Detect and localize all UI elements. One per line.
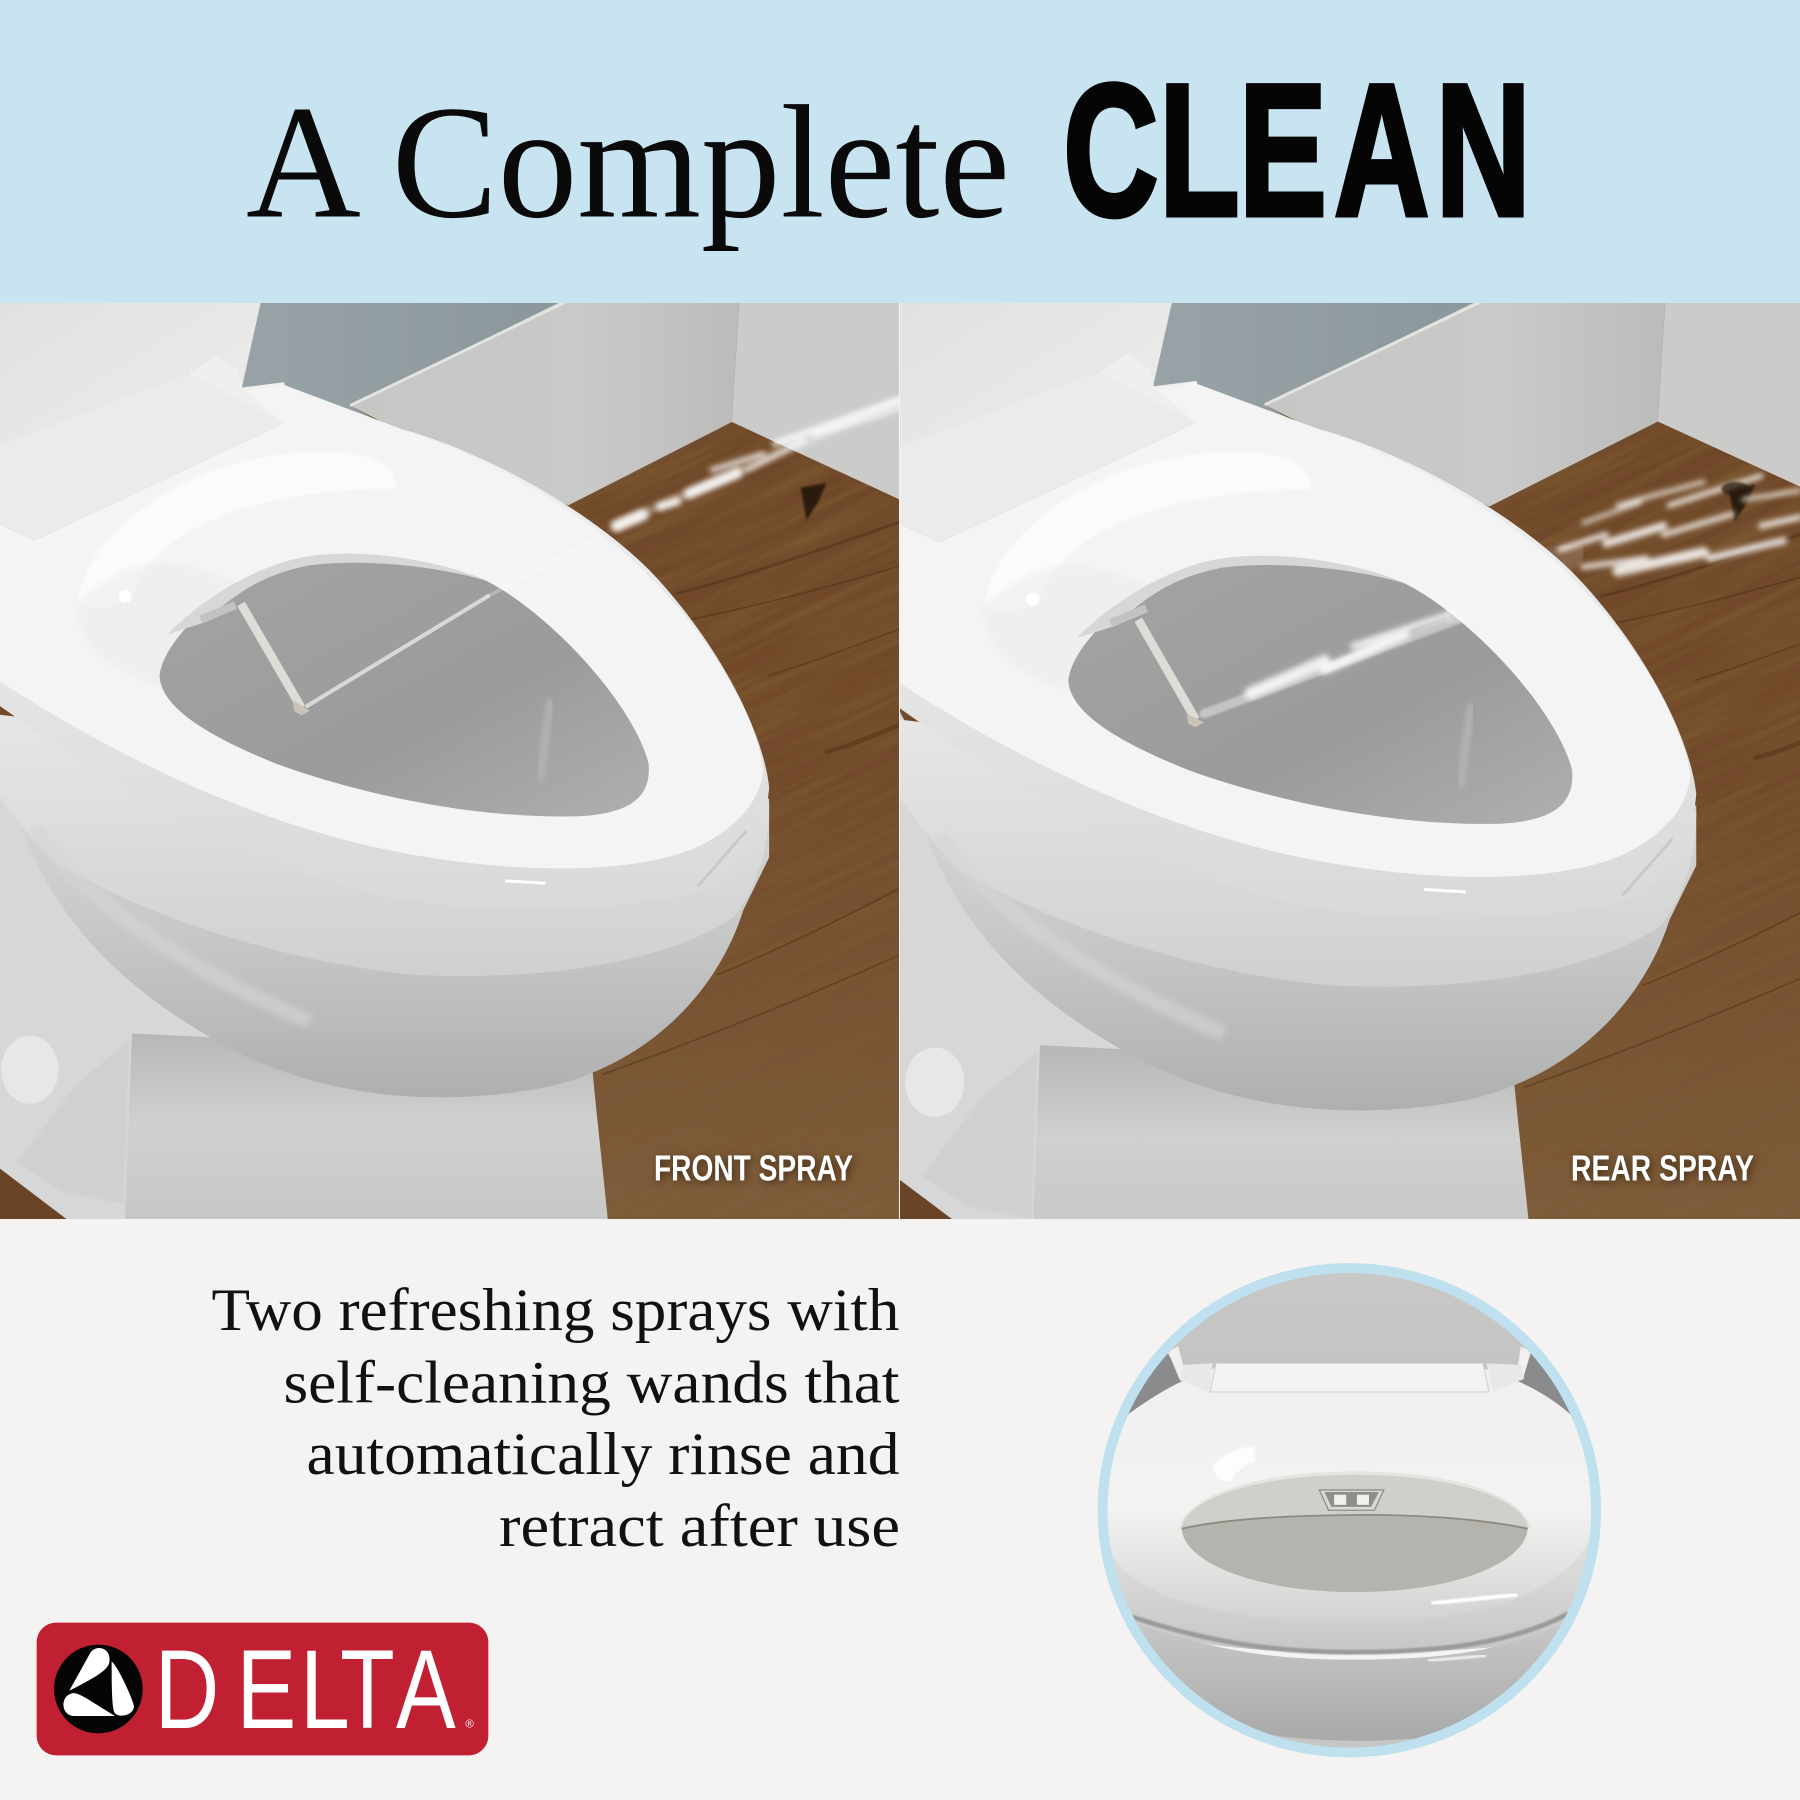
- wand, front: [241, 604, 310, 715]
- title: CLEAN: CLEAN: [1063, 46, 1531, 256]
- toilet and floor illustration, rear: [900, 303, 1800, 1219]
- body copy: automatically rinse and: [306, 1421, 900, 1487]
- body copy: [212, 1277, 900, 1559]
- body copy: Two refreshing sprays with: [212, 1277, 900, 1343]
- circular detail image: self-cleaning wands: [1098, 1263, 1601, 1758]
- body copy: retract after use: [499, 1493, 900, 1559]
- title: [246, 46, 1531, 256]
- registered mark: ®: [465, 1718, 474, 1730]
- water spray, front: [307, 400, 900, 706]
- logo wordmark: DELTA: [155, 1628, 456, 1752]
- Delta logo: [37, 1623, 488, 1755]
- logo red badge: [37, 1623, 488, 1755]
- label: REAR SPRAY: REAR SPRAY: [1571, 1148, 1754, 1188]
- detail ring: [1103, 1268, 1596, 1752]
- panel: rear spray photo: [900, 303, 1800, 1219]
- detail photo contents: [1108, 1273, 1592, 1748]
- header band: [0, 0, 1800, 303]
- title: A Complete: A Complete: [246, 74, 1010, 252]
- floor knot, rear: [1721, 482, 1749, 496]
- toilet and floor illustration, front: [0, 303, 899, 1219]
- wand, rear: [1138, 620, 1204, 727]
- water spray, rear: [1204, 476, 1800, 714]
- body copy: self-cleaning wands that: [284, 1350, 900, 1416]
- panel: front spray photo: [0, 303, 899, 1219]
- logo icon: triangle mark: [54, 1645, 143, 1733]
- label: FRONT SPRAY: FRONT SPRAY: [654, 1148, 853, 1188]
